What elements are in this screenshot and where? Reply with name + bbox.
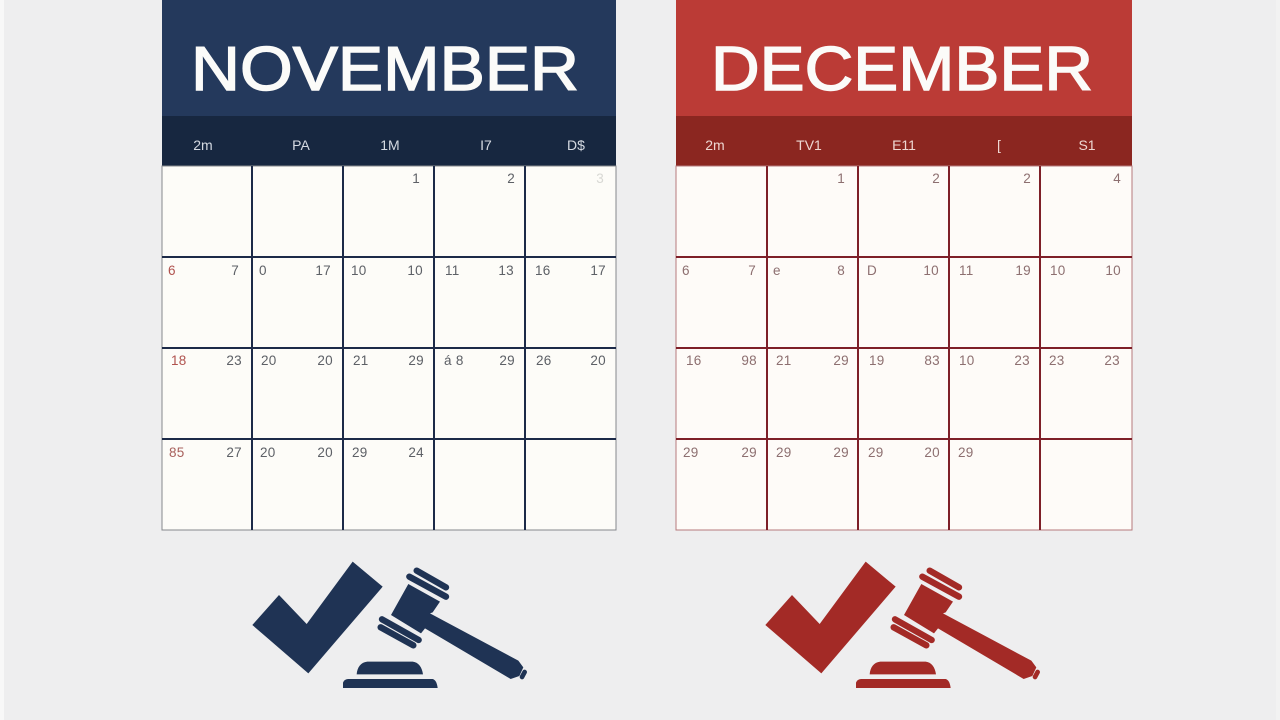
December date numbers: 19 bbox=[1015, 263, 1031, 278]
November date numbers: 0 bbox=[259, 263, 267, 278]
December weekday labels: S1 bbox=[1078, 137, 1096, 153]
November date numbers: 24 bbox=[408, 445, 424, 460]
November weekday labels: I7 bbox=[480, 137, 492, 153]
November date numbers: 2 bbox=[507, 171, 515, 186]
November date numbers bbox=[168, 171, 606, 460]
November date numbers: 10 bbox=[407, 263, 423, 278]
December date numbers: 23 bbox=[1014, 353, 1030, 368]
December date numbers: 29 bbox=[776, 445, 792, 460]
December date numbers: 1 bbox=[837, 171, 845, 186]
November date numbers: 6 bbox=[168, 263, 176, 278]
icon: gavel sound block bbox=[343, 662, 438, 688]
December date numbers: 23 bbox=[1104, 353, 1120, 368]
December date numbers: 29 bbox=[741, 445, 757, 460]
November date numbers: 26 bbox=[536, 353, 552, 368]
December date numbers: 16 bbox=[686, 353, 702, 368]
panel: December calendar bbox=[676, 0, 1132, 530]
November date numbers: 17 bbox=[590, 263, 606, 278]
November weekday labels: PA bbox=[292, 137, 310, 153]
icon: check mark bbox=[765, 562, 896, 673]
December weekday labels: 2m bbox=[705, 137, 725, 153]
December date numbers: 7 bbox=[748, 263, 756, 278]
December date numbers: 20 bbox=[924, 445, 940, 460]
November date numbers: 29 bbox=[499, 353, 515, 368]
November date numbers: 27 bbox=[226, 445, 242, 460]
December weekday labels: TV1 bbox=[796, 137, 822, 153]
November weekday labels: D$ bbox=[567, 137, 585, 153]
December date numbers: 10 bbox=[923, 263, 939, 278]
December date numbers: 29 bbox=[868, 445, 884, 460]
icon: gavel bbox=[381, 571, 525, 679]
November weekday band bbox=[162, 116, 616, 166]
icon: gavel sound block bbox=[856, 662, 951, 688]
December date numbers: e bbox=[773, 263, 781, 278]
December weekday band bbox=[676, 116, 1132, 166]
December date numbers: 10 bbox=[1105, 263, 1121, 278]
December date numbers: 29 bbox=[833, 445, 849, 460]
November date numbers: 18 bbox=[171, 353, 187, 368]
December date numbers: 23 bbox=[1049, 353, 1065, 368]
December date numbers: 29 bbox=[683, 445, 699, 460]
November weekday labels: 1M bbox=[380, 137, 400, 153]
November date numbers: 11 bbox=[445, 263, 460, 278]
November weekday labels bbox=[193, 137, 585, 153]
icon: red check mark and gavel bbox=[765, 562, 1038, 688]
December date numbers: 4 bbox=[1113, 171, 1121, 186]
November date numbers: 29 bbox=[352, 445, 368, 460]
heading: DECEMBER: DECEMBER bbox=[711, 35, 1093, 104]
November date numbers: 20 bbox=[261, 353, 277, 368]
November weekday labels: 2m bbox=[193, 137, 213, 153]
November date numbers: 1 bbox=[412, 171, 420, 186]
December date numbers: 21 bbox=[776, 353, 792, 368]
December weekday labels bbox=[705, 137, 1096, 153]
November header band bbox=[162, 0, 616, 116]
November date numbers: 10 bbox=[351, 263, 367, 278]
November date numbers: 20 bbox=[317, 353, 333, 368]
November date numbers: 21 bbox=[353, 353, 369, 368]
December weekday labels: [ bbox=[997, 137, 1001, 153]
December date numbers: 11 bbox=[959, 263, 974, 278]
November date numbers: 20 bbox=[260, 445, 276, 460]
November date numbers: 23 bbox=[226, 353, 242, 368]
December date numbers: 8 bbox=[837, 263, 845, 278]
December header band bbox=[676, 0, 1132, 116]
November date numbers: á 8 bbox=[444, 353, 464, 368]
November date numbers: 13 bbox=[498, 263, 514, 278]
December date numbers: 83 bbox=[924, 353, 940, 368]
November date numbers: 29 bbox=[408, 353, 424, 368]
December date numbers: 2 bbox=[1023, 171, 1031, 186]
November date numbers: 20 bbox=[317, 445, 333, 460]
November date grid bbox=[162, 166, 616, 530]
November date numbers: 85 bbox=[169, 445, 185, 460]
icon: navy check mark and gavel bbox=[252, 562, 525, 688]
November date numbers: 3 bbox=[596, 171, 604, 186]
December date numbers: 6 bbox=[682, 263, 690, 278]
December weekday labels: E11 bbox=[892, 137, 916, 153]
December date numbers: 29 bbox=[833, 353, 849, 368]
heading: NOVEMBER: NOVEMBER bbox=[191, 35, 579, 104]
December date numbers: 19 bbox=[869, 353, 885, 368]
icon: check mark bbox=[252, 562, 383, 673]
December date numbers: 29 bbox=[958, 445, 974, 460]
November date numbers: 20 bbox=[590, 353, 606, 368]
November date numbers: 7 bbox=[231, 263, 239, 278]
November date numbers: 16 bbox=[535, 263, 551, 278]
icon: gavel bbox=[894, 571, 1038, 679]
December date numbers: D bbox=[867, 263, 877, 278]
November date numbers: 17 bbox=[315, 263, 331, 278]
December date numbers: 10 bbox=[1050, 263, 1066, 278]
December date numbers bbox=[682, 171, 1121, 460]
panel: November calendar bbox=[162, 0, 616, 530]
December date numbers: 2 bbox=[932, 171, 940, 186]
December date grid bbox=[676, 166, 1132, 530]
December date numbers: 10 bbox=[959, 353, 975, 368]
December date numbers: 98 bbox=[741, 353, 757, 368]
